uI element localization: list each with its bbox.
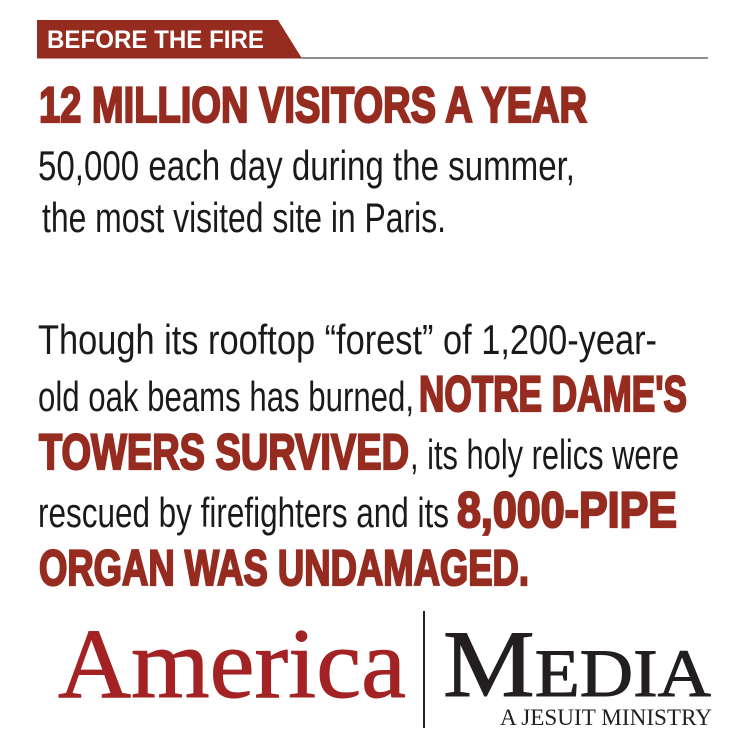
text block: what survived: 8,000-PIPE [457,482,677,538]
logo: America Media [58,608,712,730]
text block: what survived: ORGAN WAS UNDAMAGED. [39,540,529,596]
text block: what survived: TOWERS SURVIVED [39,424,409,480]
text block: visitors detail: 50,000 each day during the summer, [38,142,575,189]
text block: visitors detail [38,142,575,241]
header banner: BEFORE THE FIRE [47,26,264,54]
text block: what survived: old oak beams has burned, [38,373,414,420]
logo wordmark: Media: MEDIA [443,611,711,717]
logo tagline: A JESUIT MINISTRY [500,705,712,730]
text block: visitors detail: the most visited site in Paris. [42,194,446,241]
logo wordmark: America: America [58,608,406,719]
text block: what survived: rescued by firefighters and its [38,489,449,536]
headline: visitors: 12 MILLION VISITORS A YEAR [39,77,587,133]
header banner [37,20,708,58]
text block: what survived [38,316,687,596]
